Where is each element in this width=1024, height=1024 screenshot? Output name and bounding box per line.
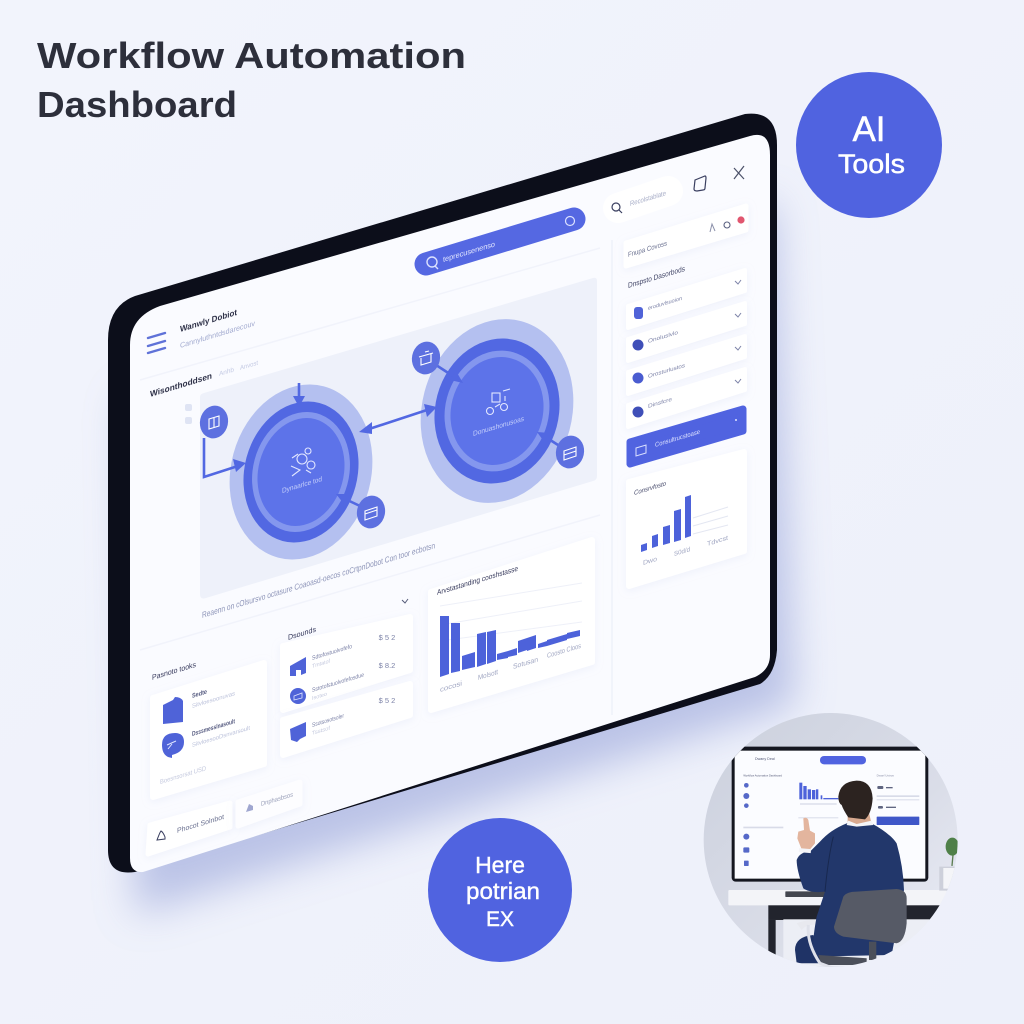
sidebar active button: Consultrucstoase [655,429,700,449]
arrow: bottom node to left hub [336,494,360,506]
sidebar mini chart: Consrvfosto [634,480,666,497]
hand [797,818,815,849]
chart bars [440,616,580,677]
badge: Here potrian EX: EX [486,908,514,931]
photo: person at monitor [700,710,960,970]
node: left [197,403,231,441]
panel: dashboards list: $ 5 2 [379,633,395,642]
tablet shadow [125,200,795,915]
icon: clipboard [694,176,706,191]
panel: bar chart [431,540,592,710]
icon: chat [162,733,184,758]
sidebar row four: Dinsfcre [648,397,672,410]
panel: tools: Dsssmesslnasoult [192,718,236,738]
sidebar row one [628,270,745,328]
person [795,781,904,963]
tablet frame [108,114,777,873]
arrow: node to left hub [204,438,238,477]
arrowhead [233,459,246,472]
search pill: secondary [612,189,668,213]
sidebar row three: Orosturlustos [648,363,685,380]
panel: dashboards list: Isoteo [312,692,327,702]
sidebar divider [611,240,613,715]
sidebar [626,206,746,586]
panel: dashboards list: Tmtatof [312,659,330,670]
chart labels: cocosi [440,679,462,694]
panel: dashboards list [283,617,410,755]
hub: left [210,368,392,576]
panel: tools: Boesnsorsat USD [160,765,206,786]
panel: tools: SitvloesooDsnvarsoult [192,725,250,749]
chair [808,889,907,968]
sidebar row two: Onoluslvlo [648,330,678,345]
sidebar row one: eroduvlsuoion [648,296,682,312]
panel: dashboards list: Sdtofostuolvofefo [312,643,352,662]
bottom tab: phocot: Phocot Solnbot [177,813,224,835]
icon: list two [290,688,306,704]
dashboard name: Wanwly Dobiot [180,307,237,334]
bottom tab: dnphasbsos [238,782,300,826]
panel: tools [152,660,264,797]
hair [838,781,873,819]
chart labels: Molsott [478,668,498,682]
panel: dashboards list: Sstotofstuolvofefosdue [312,671,364,694]
badge: Here potrian EX: Here [475,852,525,878]
node: right [553,433,587,471]
sidebar mini chart: Dwo [643,556,657,567]
mini bars [641,495,691,552]
icon: bell [157,831,165,840]
tabs row [150,360,258,424]
icon: right hub glyph [486,389,510,414]
icon: list three [290,722,306,742]
label: left hub: Dynaarlce tod [282,475,322,495]
icon: list one [290,657,306,676]
panel: workflow diagram [197,278,597,598]
badge: AI Tools: Tools [838,149,905,179]
panel: dashboards list: $ 5 2 [379,696,395,705]
desk [728,890,947,966]
tabs row: Anvost [240,360,258,372]
bottom tab: phocot [148,803,230,854]
tablet screen [130,135,770,872]
sidebar mini chart [629,452,744,586]
monitor UI: Workflow Automation Dashboard [743,773,782,777]
icon: bubble [566,216,574,226]
sidebar row four [628,369,745,427]
chevrons [402,545,588,603]
badge: AI Tools [796,72,942,218]
panel heading: Dsounds [288,625,316,642]
panel: dashboards list: Tsstsof [312,726,330,737]
arrow: between hubs [359,404,437,434]
node: top [409,339,443,377]
sidebar mini chart: S0d/d [674,546,690,558]
monitor UI [743,756,919,866]
chart labels: Sotusan [513,656,538,671]
icon: search [427,257,438,269]
bottom tab: dnphasbsos: Dnphasbsos [261,791,294,808]
badge: AI Tools: AI [852,110,886,149]
label: filters: Fnupa Covoss [628,239,667,259]
arrow: top into left hub [293,383,305,407]
arrow: right node to right hub [537,432,558,445]
badge: Here potrian EX [428,818,572,962]
plant [939,838,959,891]
search pill: primary: teprecusenenso [443,240,495,264]
monitor UI: Dwany Deal [755,757,775,761]
panel: tools: Sedte [192,689,207,700]
icon: menu [148,333,165,353]
node: bottom [354,493,388,531]
jacket [797,823,904,957]
icon: tool [163,697,183,724]
chart labels: Coosto Cloos [547,642,581,660]
sidebar mini chart: Tdvcst [707,535,728,548]
search pill: secondary: Recolstablate [630,189,666,208]
badge: Here potrian EX: potrian [466,878,540,904]
label: dashboards: Dnspsto Dasorbods [628,264,685,290]
panel: dashboards list: Ssotsosotsoler [312,713,344,729]
header [148,307,255,353]
panel: dashboards list: $ 8.2 [379,661,395,670]
title: Workflow Automation [37,35,466,76]
neck and collar [848,814,871,824]
arrow: top node to right hub [436,365,463,383]
monitor UI: Dwarf Ustros [877,774,894,778]
panel: tools: Sitvloesoonuvas [192,690,235,710]
label: right hub: Donuashonusoas [473,415,524,438]
tabs row: Anhb [219,367,234,378]
icon: left hub glyph [291,448,315,476]
title [37,35,466,125]
tablet dashboard [108,114,777,873]
sidebar card: filters [626,206,746,266]
icon: close [734,166,744,179]
dashboard subtitle: Cannyluthntdsdarecouv [180,319,255,350]
monitor [732,747,928,882]
panel heading: Pasnoto tooks [152,660,196,682]
chart heading: Arvstastanding cooshstasse [437,564,518,597]
tabs row: Wisonthoddsen [150,371,212,399]
title: Dashboard [37,84,237,125]
sidebar row three [628,336,745,394]
sidebar row two [628,303,745,361]
sidebar active button [630,409,743,464]
search pill: primary [426,216,574,269]
chart labels [440,642,581,694]
hub: right [400,302,594,520]
status icons [710,216,745,232]
caption: diagram: Reaenn on cOlsursvo octasure Coaoasd-oecos coCrtpnDobot Con toor ecbotsn [202,540,435,620]
